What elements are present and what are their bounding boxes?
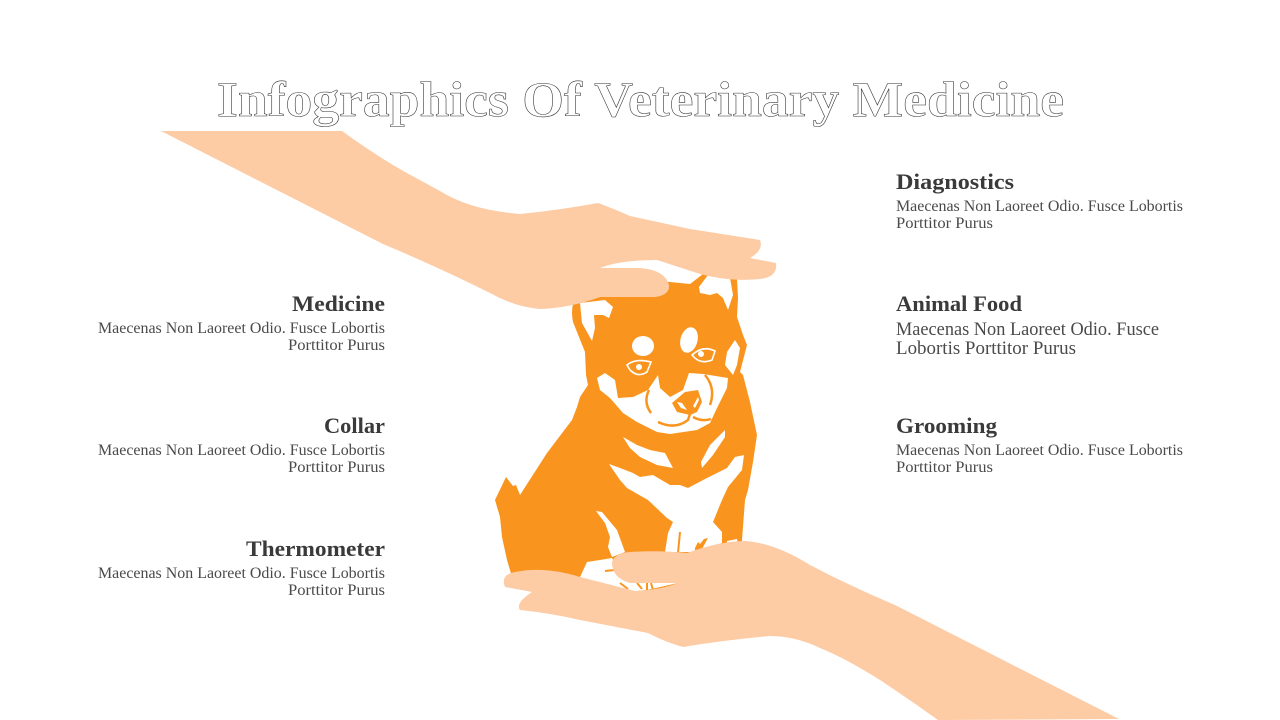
block: Thermometer: Maecenas Non Laoreet Odio. Fusce Lobortis <box>98 565 385 582</box>
block: Thermometer: Thermometer <box>246 536 385 561</box>
block: Collar: Collar <box>324 413 385 438</box>
block: Grooming: Porttitor Purus <box>896 459 993 476</box>
block: Collar <box>98 413 385 476</box>
block: Animal Food: Maecenas Non Laoreet Odio. Fusce <box>896 320 1159 340</box>
block: Medicine: Medicine <box>292 291 385 316</box>
block: Medicine: Maecenas Non Laoreet Odio. Fusce Lobortis <box>98 320 385 337</box>
icon: right eye <box>692 349 715 362</box>
block: Collar: Porttitor Purus <box>288 459 385 476</box>
block: Diagnostics: Maecenas Non Laoreet Odio. Fusce Lobortis <box>896 198 1183 215</box>
illustration: upper hand <box>161 131 776 309</box>
block: Medicine: Porttitor Purus <box>288 337 385 354</box>
block: Animal Food <box>896 291 1159 359</box>
block: Thermometer <box>98 536 385 599</box>
block: Animal Food: Animal Food <box>896 291 1022 316</box>
illustration: lower hand <box>504 541 1119 720</box>
block: Diagnostics: Diagnostics <box>896 169 1014 194</box>
title: Infographics Of Veterinary Medicine <box>217 71 1064 127</box>
block: Medicine <box>98 291 385 354</box>
block: Thermometer: Porttitor Purus <box>288 582 385 599</box>
block: Collar: Maecenas Non Laoreet Odio. Fusce Lobortis <box>98 442 385 459</box>
icon: left eye <box>627 361 651 375</box>
block: Diagnostics: Porttitor Purus <box>896 215 993 232</box>
block: Grooming: Maecenas Non Laoreet Odio. Fusce Lobortis <box>896 442 1183 459</box>
block: Animal Food: Lobortis Porttitor Purus <box>896 339 1076 359</box>
block: Grooming: Grooming <box>896 413 997 438</box>
block: Diagnostics <box>896 169 1183 232</box>
illustration: orange puppy <box>495 270 757 600</box>
block: Grooming <box>896 413 1183 476</box>
